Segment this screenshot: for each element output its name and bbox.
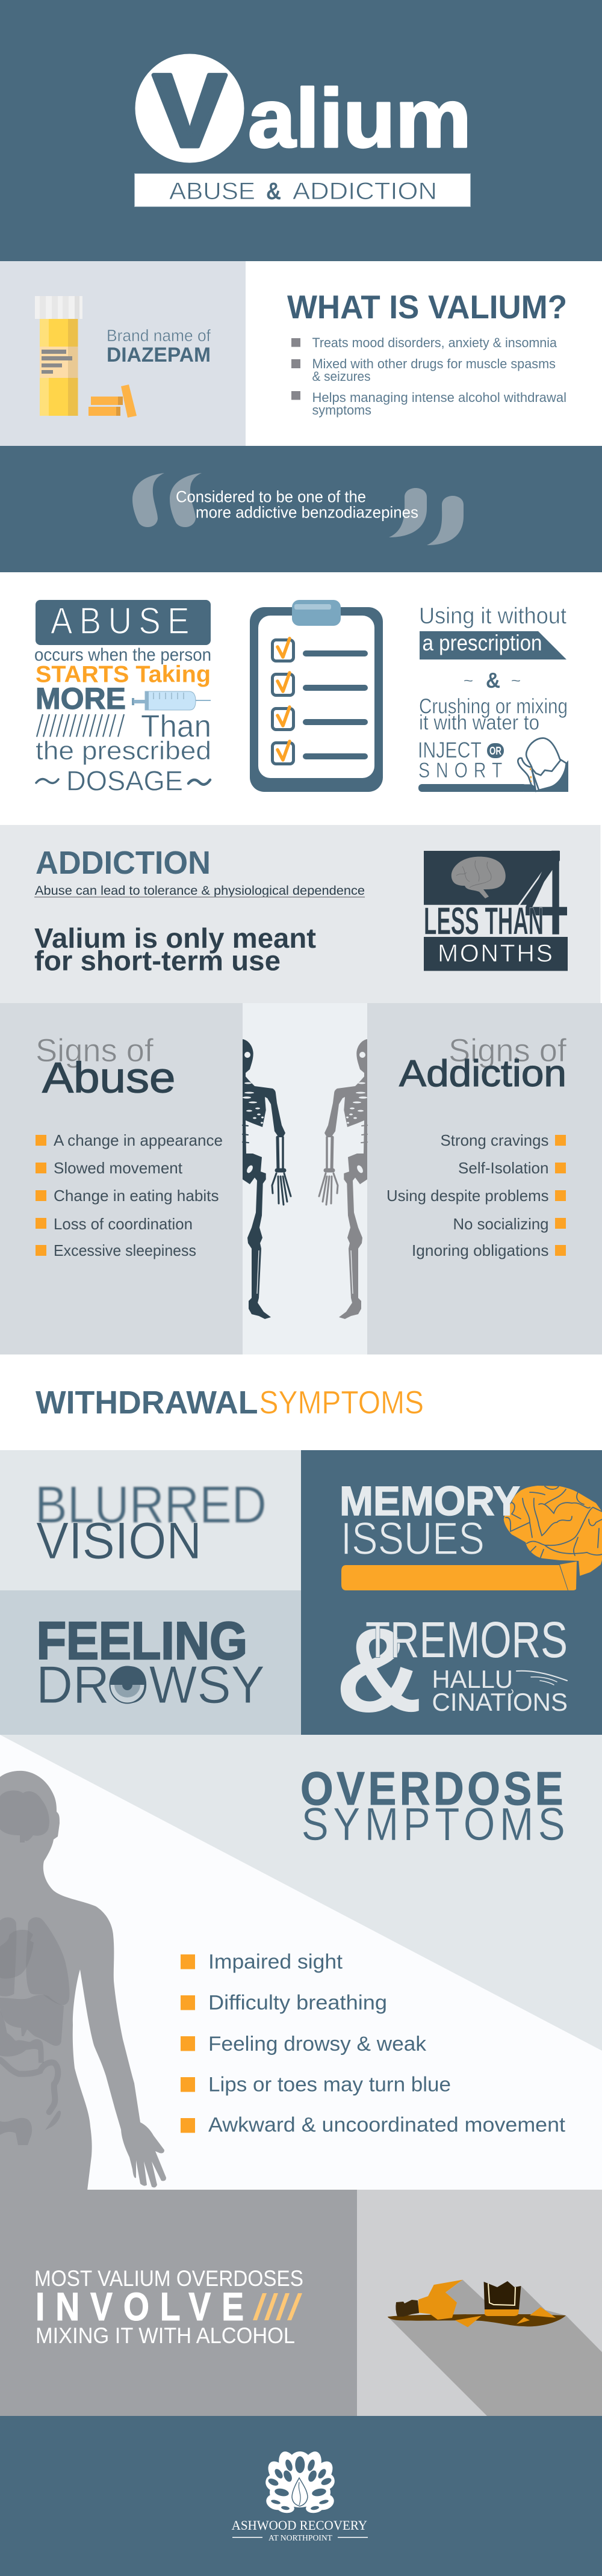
list: signs of addiction: No socializing <box>453 1215 549 1233</box>
panel: alcohol overdoses <box>0 2190 602 2416</box>
title: Valium logo <box>135 53 471 168</box>
icon: person snorting <box>518 738 568 792</box>
text: most valium overdoses <box>34 2266 303 2348</box>
subtitle: abuse and addiction <box>135 173 471 207</box>
subtitle: abuse and addiction: ADDICTION <box>293 178 437 205</box>
icon: drowsy eye <box>110 1666 145 1703</box>
text: quote: more addictive benzodiazepines <box>196 503 418 521</box>
text: quote: Considered to be one of the <box>176 487 366 505</box>
list: signs of addiction <box>386 1131 566 1259</box>
panel: abuse <box>34 600 568 797</box>
text: ashwood recovery: AT NORTHPOINT <box>268 2534 332 2543</box>
list: what is valium bullets: Treats mood disorders, anxiety & insomnia <box>312 335 557 350</box>
text: brand name of diazepam <box>107 326 211 366</box>
text: misuse methods: SNORT <box>418 758 502 782</box>
abuse definition text: the prescribed <box>36 737 211 765</box>
panel: header <box>0 0 602 261</box>
heading: signs of addiction: Signs of <box>448 1033 567 1069</box>
icon: pills <box>88 385 137 418</box>
abuse definition text: MORE <box>36 682 126 715</box>
text: brand name of diazepam: Brand name of <box>107 326 211 345</box>
title: Valium logo: alium <box>248 72 471 165</box>
list: overdose symptoms: Feeling drowsy & weak <box>208 2033 427 2056</box>
text: most valium overdoses: MOST VALIUM OVERDOSES <box>34 2266 303 2291</box>
list: overdose symptoms: Awkward & uncoordinated movement <box>208 2114 566 2137</box>
list: what is valium bullets: Mixed with other drugs for muscle spasms <box>312 356 556 371</box>
text: ashwood recovery <box>232 2518 368 2543</box>
text: misuse methods: & <box>486 668 500 693</box>
callout: less than 4 months: MONTHS <box>438 939 553 967</box>
list: signs of addiction: Using despite problems <box>386 1187 549 1205</box>
abuse definition text: Than <box>141 709 211 744</box>
icon: skeleton dark <box>243 1039 291 1319</box>
list: what is valium bullets: symptoms <box>312 403 371 418</box>
text: misuse methods: ~ <box>464 675 473 688</box>
text: short-term use <box>34 922 316 976</box>
text: blurred vision <box>35 1476 267 1570</box>
icon: broken bottle and spilled drink <box>388 2280 602 2416</box>
abuse definition text: DOSAGE <box>66 765 183 797</box>
text: short-term use: Valium is only meant <box>34 922 316 954</box>
heading: signs of abuse: Signs of <box>36 1033 154 1069</box>
heading: signs of abuse <box>36 1033 176 1102</box>
list: what is valium bullets <box>291 335 566 418</box>
icon: body silhouette with organs <box>0 1771 166 2190</box>
panel: withdrawal symptoms grid <box>0 1450 602 1737</box>
icon: syringe <box>132 691 211 710</box>
title: Valium logo: V <box>153 53 226 168</box>
text: tremors and hallucinations: CINATIONS <box>432 1688 568 1716</box>
text: memory issues: MEMORY <box>340 1478 520 1524</box>
list: overdose symptoms <box>181 1951 566 2137</box>
text: quote <box>176 487 418 521</box>
text: blurred vision: VISION <box>36 1512 202 1570</box>
heading: overdose symptoms: OVERDOSE <box>300 1762 563 1815</box>
icon: skeleton grey <box>319 1039 367 1319</box>
callout: less than 4 months: 4 <box>524 824 569 960</box>
abuse definition text: occurs when the person <box>34 645 211 665</box>
list: signs of abuse: A change in appearance <box>54 1131 223 1149</box>
icon: hallucination waves <box>510 1671 567 1694</box>
icon: orange bar <box>341 1565 568 1590</box>
text: misuse methods <box>418 604 568 792</box>
list: signs of abuse <box>36 1131 223 1259</box>
callout: less than 4 months <box>424 824 569 971</box>
icon: orange brain <box>504 1486 602 1590</box>
text: misuse methods: Using it without <box>419 604 566 629</box>
text: tolerance note: Abuse can lead to tolerance & physiological dependence <box>35 884 365 898</box>
text: misuse methods: ~ <box>511 675 521 688</box>
text: misuse methods: OR <box>489 745 501 757</box>
text: brand name of diazepam: DIAZEPAM <box>107 344 211 366</box>
abuse definition text: ABUSE <box>51 601 190 642</box>
heading: signs of addiction <box>399 1033 567 1095</box>
heading: signs of abuse: Abuse <box>42 1054 176 1102</box>
heading: overdose symptoms: SYMPTOMS <box>302 1799 565 1850</box>
subtitle: abuse and addiction: ABUSE <box>169 178 255 205</box>
text: tremors and hallucinations: & <box>335 1604 423 1737</box>
icon: ashwood peacock logo <box>262 2448 338 2514</box>
text: memory issues: ISSUES <box>341 1513 485 1564</box>
text: memory issues <box>340 1478 568 1590</box>
icon: grey brain <box>452 857 506 898</box>
text: feeling drowsy: FEELING <box>37 1611 247 1670</box>
heading: addiction: ADDICTION <box>36 845 211 881</box>
text: misuse methods: it with water to <box>419 711 539 734</box>
text: most valium overdoses: MIXING IT WITH ALCOHOL <box>36 2323 295 2348</box>
panel: quote band <box>0 446 602 572</box>
abuse definition text: STARTS Taking <box>36 662 211 687</box>
text: ashwood recovery: ASHWOOD RECOVERY <box>232 2518 367 2533</box>
organs <box>0 1791 69 2145</box>
list: signs of addiction: Self-Isolation <box>458 1159 549 1177</box>
list: signs of abuse: Slowed movement <box>54 1159 183 1177</box>
panel: signs <box>0 1003 602 1354</box>
subtitle: abuse and addiction: & <box>266 178 281 205</box>
list: signs of abuse: Change in eating habits <box>54 1187 219 1205</box>
heading: withdrawal symptoms <box>36 1385 424 1421</box>
icon: opening quote marks <box>132 473 202 527</box>
text: short-term use: for short-term use <box>34 945 281 976</box>
panel: brand name <box>0 261 246 446</box>
icon: closing quote marks <box>389 488 464 545</box>
list: overdose symptoms: Lips or toes may turn blue <box>208 2074 451 2096</box>
list: overdose symptoms: Impaired sight <box>208 1951 343 1974</box>
panel: footer <box>0 2416 602 2576</box>
list: signs of abuse: Loss of coordination <box>54 1215 193 1233</box>
list: overdose symptoms: Difficulty breathing <box>208 1992 387 2015</box>
text: tremors and hallucinations <box>335 1604 568 1737</box>
heading: what is valium: WHAT IS VALIUM? <box>287 288 567 326</box>
icon: orange slashes <box>253 2293 302 2320</box>
list: signs of addiction: Ignoring obligations <box>412 1241 549 1259</box>
heading: withdrawal symptoms: SYMPTOMS <box>259 1385 424 1421</box>
list: signs of abuse: Excessive sleepiness <box>54 1241 196 1259</box>
text: misuse methods: Crushing or mixing <box>419 694 568 718</box>
icon: clipboard checklist <box>250 600 383 792</box>
text: blurred vision: BLURRED <box>35 1476 267 1534</box>
text: tremors and hallucinations: HALLU <box>432 1665 513 1693</box>
heading: withdrawal symptoms: WITHDRAWAL <box>36 1385 258 1421</box>
panel: what is valium <box>287 288 567 418</box>
text: misuse methods: a prescription <box>423 631 542 655</box>
heading: signs of addiction: Addiction <box>399 1053 566 1095</box>
heading: overdose symptoms <box>300 1762 565 1850</box>
list: signs of addiction: Strong cravings <box>441 1131 549 1149</box>
icon: pill bottle <box>35 296 82 416</box>
panel: addiction <box>0 824 601 1003</box>
panel: overdose symptoms <box>0 1735 602 2190</box>
text: feeling drowsy: DROWSY <box>36 1655 265 1714</box>
list: what is valium bullets: & seizures <box>312 369 371 384</box>
text: misuse methods: INJECT <box>418 738 482 762</box>
list: what is valium bullets: Helps managing intense alcohol withdrawal <box>312 390 566 405</box>
text: most valium overdoses: INVOLVE <box>36 2284 244 2329</box>
abuse definition text <box>34 600 211 797</box>
text: feeling drowsy <box>36 1611 265 1714</box>
